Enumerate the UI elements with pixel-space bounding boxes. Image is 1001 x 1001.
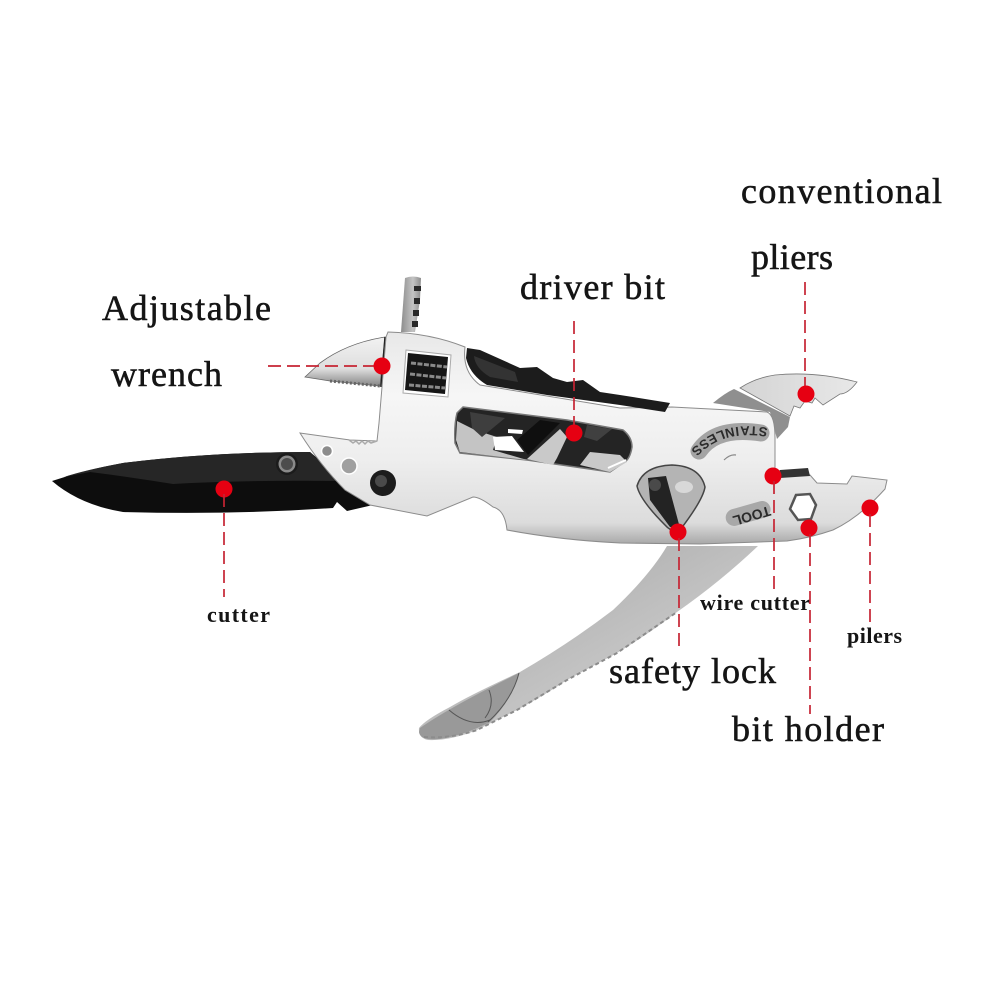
marker [670,524,686,540]
label: conventional: conventional [741,171,942,211]
callout: cutter [207,480,270,627]
serrated saw blade [419,546,758,740]
leader line [268,365,376,367]
tool engraved plate: TOOL [731,503,773,529]
leader line [804,282,806,390]
marker [800,520,818,536]
safety lock recess [637,465,705,531]
black rubber handle [466,348,670,412]
label: bit holder: bit holder [732,709,884,749]
upper plier jaw back [713,389,790,439]
stainless engraved plate: STAINLESS [692,426,768,456]
label: pilers: pilers [847,623,902,648]
label: driver bit: driver bit [520,267,665,307]
marker [216,480,232,498]
callout: conventional pliers [741,171,942,402]
lower wrench jaw holes [322,446,357,474]
knife blade [52,452,373,513]
label: wrench: wrench [111,354,222,394]
label: Adjustable: Adjustable [102,288,271,328]
marker [862,500,878,516]
callout: pilers [847,500,902,648]
hex bit holder [790,494,816,520]
callout: adjustable wrench [102,288,390,394]
label: wire cutter: wire cutter [700,590,810,615]
label: safety lock: safety lock [609,651,776,691]
marker [374,358,390,374]
marker [764,468,782,484]
label: cutter: cutter [207,602,270,627]
upper wrench jaw [305,337,385,387]
callout: bit holder [732,520,884,749]
handle groove [474,356,518,382]
leader line [223,494,225,597]
bit storage window [455,407,632,472]
wire cutter slot [780,468,810,478]
main tool body [300,332,887,544]
upper plier jaw [740,374,857,416]
marker [566,424,582,442]
label: pliers: pliers [751,237,833,277]
adjustment worm gear window [403,350,451,397]
callout: driver bit [520,267,665,442]
leader line [773,481,775,595]
pivot boss [724,455,736,460]
callout: safety lock [609,524,776,691]
leader line [678,538,680,648]
leader line [809,534,811,714]
lower wrench jaw teeth [349,440,377,444]
driver bit shaft [401,276,421,332]
marker [798,386,814,402]
pivot screw [370,470,396,496]
leader line [869,514,871,623]
leader line [573,321,575,428]
callout: wire cutter [700,468,810,615]
multi-tool illustration [52,276,888,740]
